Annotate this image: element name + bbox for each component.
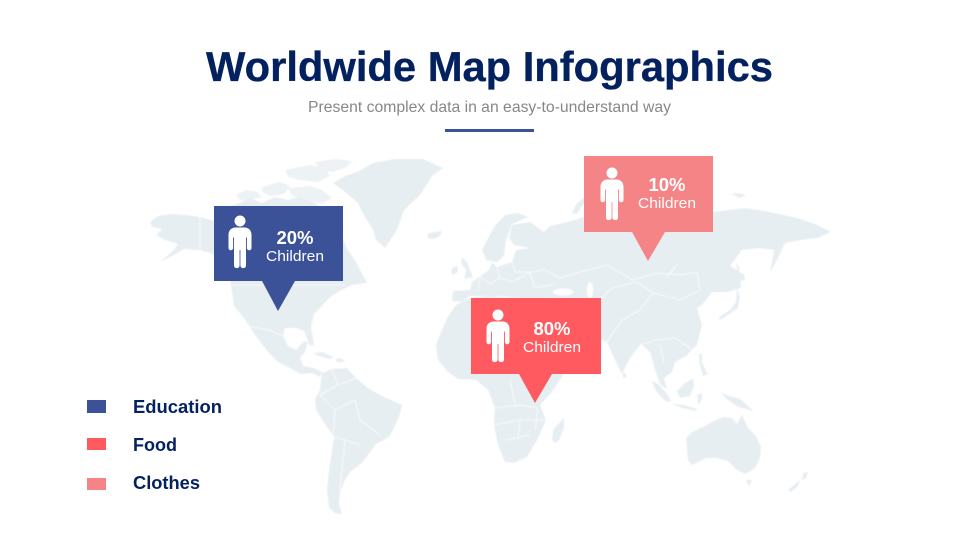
world map <box>150 159 831 514</box>
icon: person <box>486 310 510 362</box>
value: 10% <box>648 174 686 195</box>
Philippines <box>699 354 708 376</box>
Africa <box>436 296 565 463</box>
Arctic Russia islands <box>732 193 746 198</box>
Scandinavia <box>482 213 528 262</box>
Cuba and Hispaniola <box>313 352 345 362</box>
legend item: food: Food <box>133 435 177 455</box>
Canadian Arctic islands <box>236 159 352 204</box>
icon: person <box>600 168 624 220</box>
callout: clothes 10% <box>584 156 713 261</box>
title divider <box>445 129 534 132</box>
label: Children <box>266 248 324 265</box>
Sulawesi <box>697 393 702 405</box>
New Guinea <box>721 393 754 412</box>
Sakhalin <box>736 262 740 280</box>
legend item: education: Education <box>133 397 222 417</box>
Australia <box>686 415 761 474</box>
Sri Lanka <box>623 372 626 378</box>
callout: food 80% <box>471 298 601 403</box>
country borders <box>200 217 700 490</box>
legend item: clothes: Clothes <box>133 473 200 493</box>
South America <box>315 368 402 514</box>
Novaya Zemlya <box>572 196 590 214</box>
legend <box>87 397 222 493</box>
inland seas <box>553 263 678 298</box>
subtitle: Present complex data in an easy-to-understand way <box>308 99 671 116</box>
New Zealand <box>788 472 808 492</box>
Japan <box>737 272 745 281</box>
value: 20% <box>276 227 314 248</box>
Eurasia <box>452 196 831 390</box>
Sumatra <box>652 381 671 402</box>
Madagascar <box>552 418 564 443</box>
Tasmania <box>746 480 752 485</box>
Borneo <box>677 378 694 398</box>
British Isles <box>451 257 473 279</box>
title: Worldwide Map Infographics <box>206 43 773 90</box>
Iceland <box>427 231 442 239</box>
icon: person <box>228 216 252 268</box>
North America <box>150 197 367 377</box>
callout: education 20% <box>214 206 343 311</box>
label: Children <box>638 195 696 212</box>
value: 80% <box>533 318 571 339</box>
Greenland <box>333 159 443 248</box>
label: Children <box>523 339 581 356</box>
Java <box>672 404 697 411</box>
